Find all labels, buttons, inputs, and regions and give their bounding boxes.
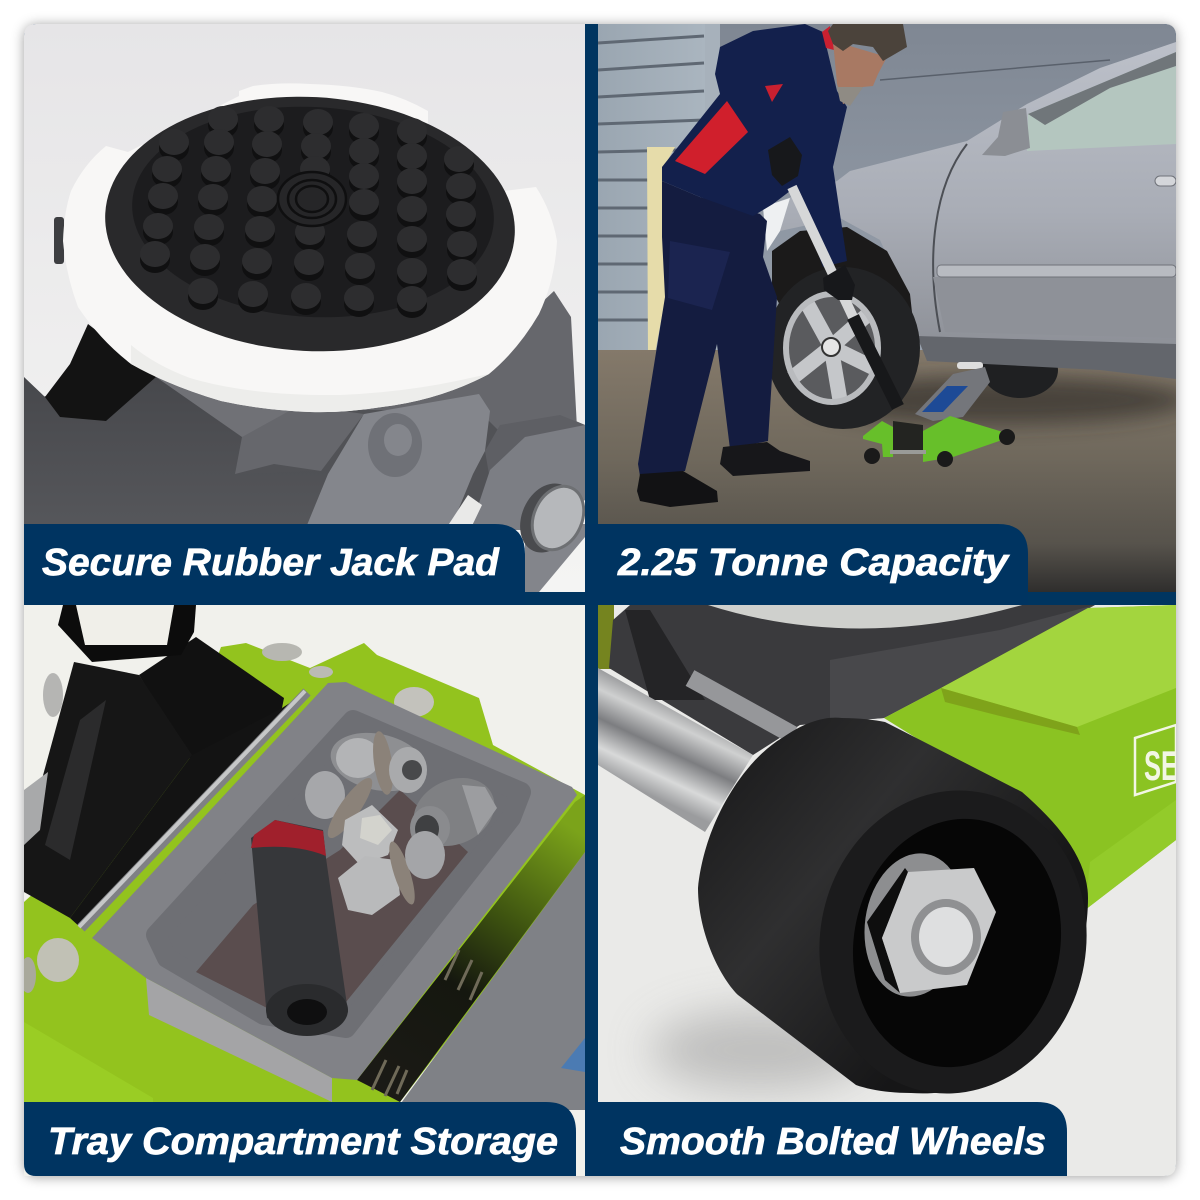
nut D [338,831,445,915]
capacity text: 2.25 Tonne Capacity [617,542,1010,584]
shutter door [598,24,720,350]
lower door [933,277,1176,312]
caption text: Secure Rubber Jack Pad [42,542,500,584]
nut A [325,725,431,799]
car shadow [810,376,1190,424]
door handle [1155,176,1176,186]
chrome rod [79,691,307,928]
ground [598,350,1176,592]
green body [24,643,585,1102]
tray text: Tray Compartment Storage [48,1121,558,1163]
black arm [24,605,307,928]
caption tab: tray [24,1102,576,1176]
washer [855,847,975,1003]
bolts around arm [20,643,434,993]
wheel [698,718,1110,1115]
floor jack [863,362,1015,467]
wheel arch [772,227,912,312]
rear tyre [982,364,1058,398]
panel: tray compartment [20,605,585,1176]
red panel upper [765,84,783,102]
mirror [982,108,1030,156]
tyre [766,267,920,429]
alloy rim [786,294,878,402]
bright bumper reflection [763,198,790,251]
nut C [402,765,506,859]
jacket [662,24,847,267]
door line [933,144,967,332]
sill [917,336,1176,379]
red panel [675,101,748,174]
caption tab: capacity [585,524,1028,605]
dark clip behind ring [54,217,64,264]
panel: rubber jack pad photo [24,24,593,592]
chassis and gap [357,795,585,1110]
jack handle [792,187,898,407]
brand lettering: SE [1144,742,1178,789]
studs [140,106,477,318]
centre boss rings [278,172,346,226]
big chrome rod [598,668,753,832]
wheels text: Smooth Bolted Wheels [620,1121,1046,1163]
wall [720,24,1176,350]
small rod [690,678,793,735]
dark block [609,605,1095,755]
wheel nuts [305,725,506,915]
tray liner [196,790,468,1008]
head [828,24,907,106]
nut B [305,771,398,865]
socket [251,820,348,1036]
car window [1027,52,1176,151]
caption tab: wheels [585,1102,1067,1176]
upper glove [768,137,802,186]
white pad holder [63,83,557,412]
hex nut [867,868,908,993]
olive glimpse [598,605,614,669]
lower glove [823,265,855,300]
brand plate [1135,725,1176,795]
pad underside [708,605,1022,628]
car body [763,42,1176,350]
shoe front [637,471,718,507]
metal tray [92,682,577,1102]
panel: bolted wheel [598,605,1178,1176]
shoe rear [720,442,810,476]
collar [822,26,834,50]
door strip [937,265,1176,277]
axle bolt [520,484,585,552]
yellow post [647,147,675,359]
jack body [24,291,585,592]
panel: mechanic lifting car [598,24,1190,592]
caption tab: jack pad [24,524,525,605]
cargo pocket [668,241,730,310]
rubber pad [105,96,515,352]
trousers [638,181,777,476]
floor shadow [650,1010,870,1090]
green arm [884,605,1178,910]
